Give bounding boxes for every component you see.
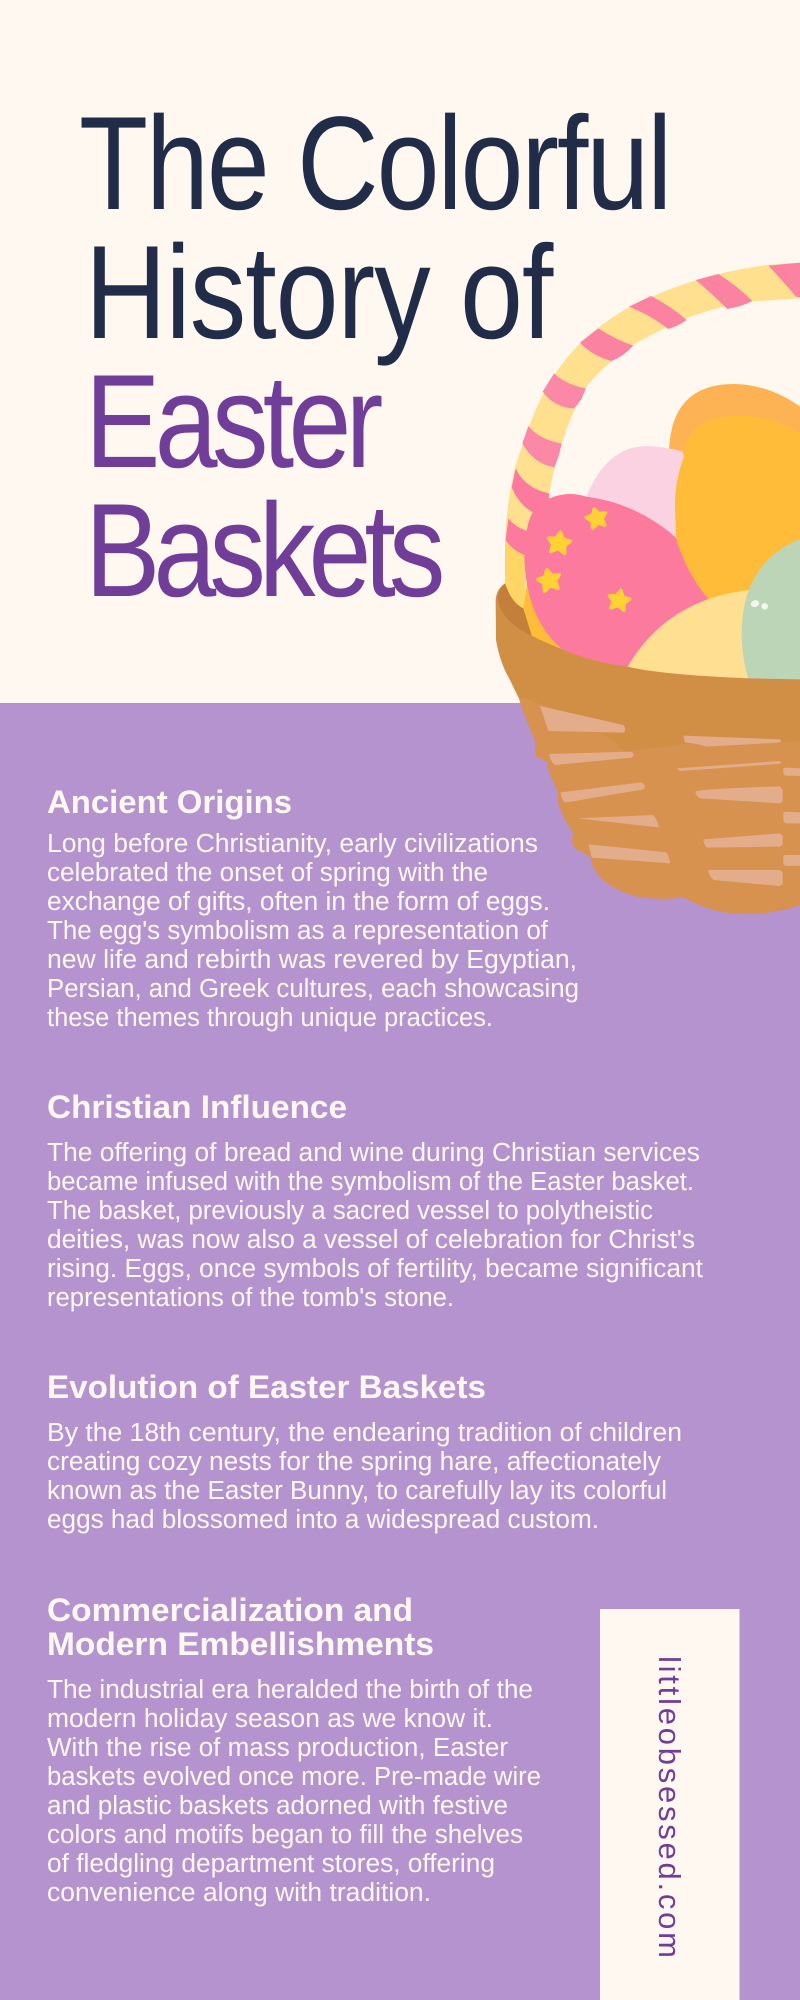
illustration: easter basket with eggs <box>496 263 800 914</box>
section: Evolution of Easter Baskets <box>47 1369 682 1534</box>
basket rim <box>496 583 800 751</box>
section: Ancient Origins <box>47 784 579 1032</box>
body text: Commercialization and Modern Embellishments: With the rise of mass production, Easter <box>47 1734 509 1762</box>
basket lower weave body <box>518 697 800 914</box>
basket handle <box>505 263 800 610</box>
section: Commercialization and Modern Embellishments <box>47 1592 541 1907</box>
section: Christian Influence <box>47 1089 703 1312</box>
title: History of <box>85 218 554 367</box>
body text: Commercialization and Modern Embellishments: and plastic baskets adorned with festive <box>47 1792 508 1820</box>
basket weave strips <box>540 706 800 886</box>
heading: Ancient Origins: Ancient Origins <box>47 784 292 820</box>
body text: Christian Influence <box>47 1139 703 1312</box>
body text: Ancient Origins: Long before Christianity, early civilizations <box>47 830 538 858</box>
body text: Christian Influence: representations of the tomb's stone. <box>47 1284 454 1312</box>
purple content panel <box>0 703 800 2000</box>
body text: Evolution of Easter Baskets: creating cozy nests for the spring hare, affectionately <box>47 1448 661 1476</box>
body text: Evolution of Easter Baskets: By the 18th century, the endearing tradition of children <box>47 1419 682 1447</box>
body text: Christian Influence: became infused with the symbolism of the Easter basket. <box>47 1168 694 1196</box>
title <box>79 89 672 625</box>
body text: Christian Influence: rising. Eggs, once symbols of fertility, became significant <box>47 1255 703 1283</box>
title: Baskets <box>85 476 445 625</box>
body text: Commercialization and Modern Embellishments: The industrial era heralded the birth of the <box>47 1676 533 1704</box>
cream header background <box>0 0 800 703</box>
body text: Evolution of Easter Baskets <box>47 1419 682 1534</box>
body text: Commercialization and Modern Embellishments: modern holiday season as we know it. <box>47 1705 493 1733</box>
egg: pink with stars <box>524 494 710 670</box>
body text: Christian Influence: The basket, previously a sacred vessel to polytheistic <box>47 1197 653 1225</box>
egg: pale pink <box>587 446 684 538</box>
egg: peach back egg <box>669 384 800 517</box>
body text: Commercialization and Modern Embellishments: of fledgling department stores, offering <box>47 1850 495 1878</box>
body text: Christian Influence: The offering of bread and wine during Christian services <box>47 1139 700 1167</box>
heading: Commercialization and Modern Embellishments <box>47 1592 434 1662</box>
body text: Ancient Origins <box>47 830 579 1032</box>
body text: Ancient Origins: celebrated the onset of spring with the <box>47 859 488 887</box>
body text: Ancient Origins: exchange of gifts, often in the form of eggs. <box>47 888 550 916</box>
body text: Evolution of Easter Baskets: known as the Easter Bunny, to carefully lay its colorful <box>47 1477 667 1505</box>
body text: Commercialization and Modern Embellishments: baskets evolved once more. Pre-made wire <box>47 1763 541 1791</box>
body text: Commercialization and Modern Embellishments: colors and motifs began to fill the shelves <box>47 1821 523 1849</box>
website text: littleobsessed.com <box>652 1656 687 1958</box>
body text: Christian Influence: deities, was now also a vessel of celebration for Christ's <box>47 1226 695 1254</box>
body text: Ancient Origins: The egg's symbolism as a representation of <box>47 917 549 945</box>
footer: website tab <box>600 1609 740 2000</box>
body text: Commercialization and Modern Embellishments: convenience along with tradition. <box>47 1879 431 1907</box>
egg: orange <box>674 416 800 633</box>
heading: Christian Influence: Christian Influence <box>47 1089 347 1125</box>
body text: Ancient Origins: new life and rebirth was revered by Egyptian, <box>47 946 577 974</box>
body text: Ancient Origins: Persian, and Greek cultures, each showcasing <box>47 975 579 1003</box>
heading: Commercialization and Modern Embellishments: Commercialization and <box>47 1592 413 1628</box>
title: The Colorful <box>79 89 672 238</box>
body text: Commercialization and Modern Embellishments <box>47 1676 541 1907</box>
heading: Evolution of Easter Baskets: Evolution of Easter Baskets <box>47 1369 486 1405</box>
egg: green <box>742 539 800 683</box>
body text: Evolution of Easter Baskets: eggs had blossomed into a widespread custom. <box>47 1506 599 1534</box>
title: Easter <box>85 347 383 496</box>
egg: orange sliver behind pink egg <box>523 583 565 653</box>
body text: Ancient Origins: these themes through unique practices. <box>47 1004 493 1032</box>
heading: Commercialization and Modern Embellishments: Modern Embellishments <box>47 1626 434 1662</box>
egg: pale yellow <box>628 590 757 683</box>
basket rim inner shadow <box>498 583 532 636</box>
